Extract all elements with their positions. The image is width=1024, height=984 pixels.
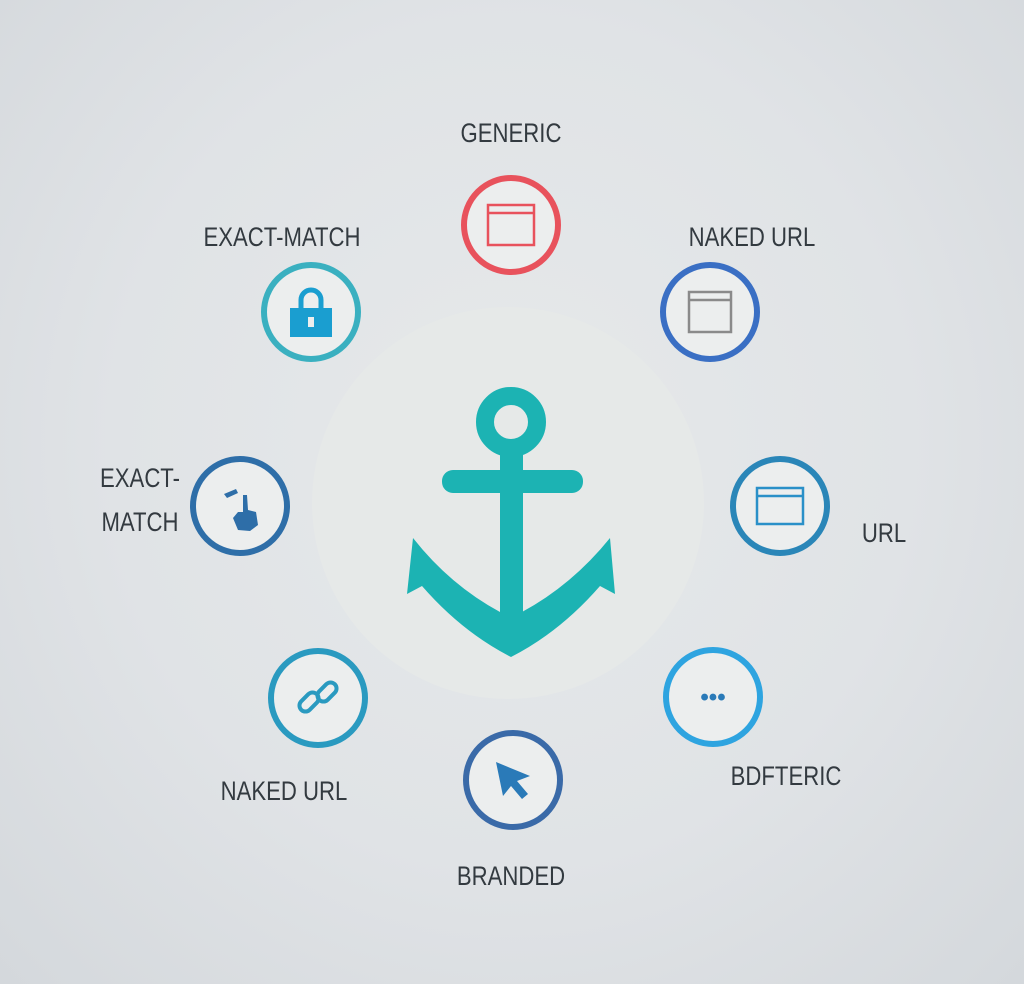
icon: url — [733, 459, 827, 553]
icon: naked url top right — [663, 265, 757, 359]
label: bdfteric: BDFTERIC — [731, 761, 841, 791]
icon: dots bottom right: ••• — [700, 684, 726, 711]
icon: hand — [193, 459, 287, 553]
center glow — [312, 307, 704, 699]
icon: lock — [264, 265, 358, 359]
icon: link — [271, 651, 365, 745]
label: exact-match left: EXACT- — [100, 463, 180, 493]
icon: generic (red window) — [464, 178, 558, 272]
icon: branded cursor — [466, 733, 560, 827]
label: generic: GENERIC — [461, 118, 561, 148]
label: naked url bottom: NAKED URL — [221, 776, 347, 806]
label: exact-match left — [100, 463, 180, 537]
label: exact-match top: EXACT-MATCH — [203, 222, 361, 252]
label: naked url top: NAKED URL — [689, 222, 815, 252]
icon: dots bottom right — [666, 650, 760, 744]
icon: anchor — [407, 396, 615, 657]
label: url: URL — [862, 518, 906, 548]
label: exact-match left: MATCH — [101, 507, 179, 537]
label: branded: BRANDED — [457, 861, 565, 891]
